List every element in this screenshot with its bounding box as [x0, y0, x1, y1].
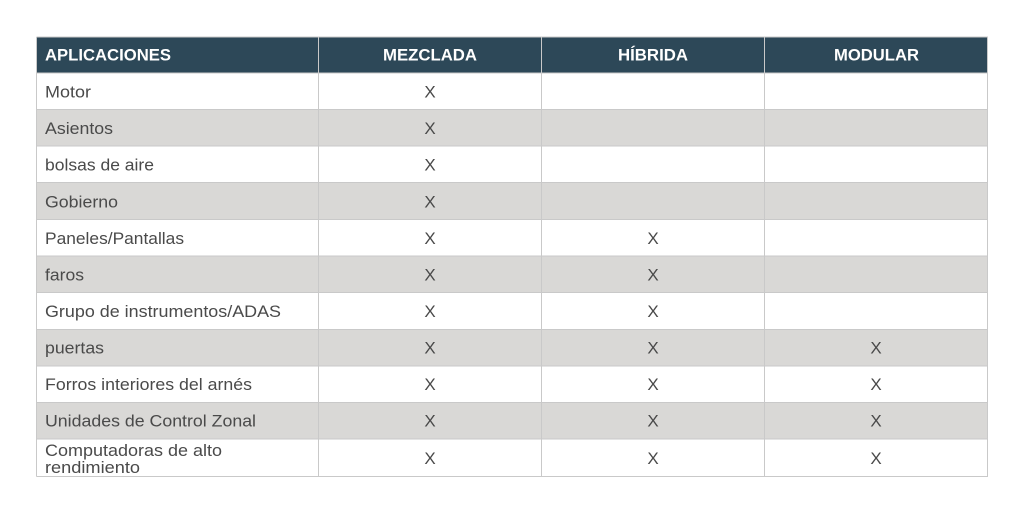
row: Paneles/Pantallas: [45, 229, 659, 248]
row: Unidades de Control Zonal: Unidades de Control Zonal: [45, 412, 256, 430]
row: Computadoras de alto rendimiento: Computadoras de alto: [45, 441, 222, 460]
row: puertas: X: [647, 338, 659, 358]
row: puertas: [45, 338, 882, 358]
row: Forros interiores del arnés: X: [647, 375, 659, 394]
table header row: APLICACIONES: [45, 46, 171, 64]
row: Grupo de instrumentos/ADAS: X: [647, 302, 659, 321]
shaded row backgrounds: [36, 110, 988, 439]
row: Gobierno: X: [424, 192, 436, 212]
row: Motor: X: [424, 82, 436, 102]
row: Asientos: Asientos: [45, 119, 113, 138]
table header row: [36, 37, 988, 73]
row: Forros interiores del arnés: Forros interiores del arnés: [45, 375, 252, 394]
row: Forros interiores del arnés: X: [424, 375, 436, 394]
row: Grupo de instrumentos/ADAS: X: [424, 302, 436, 321]
row: Forros interiores del arnés: [45, 375, 882, 394]
row: Gobierno: Gobierno: [45, 192, 118, 212]
table header row: MODULAR: [834, 46, 919, 64]
row: faros: X: [424, 266, 436, 284]
row: Gobierno: [45, 192, 436, 212]
row: Computadoras de alto rendimiento: rendimiento: [45, 458, 140, 477]
row: bolsas de aire: X: [424, 156, 436, 174]
row: Motor: [45, 82, 436, 102]
row: Paneles/Pantallas: X: [424, 229, 436, 248]
row: Computadoras de alto rendimiento: [45, 441, 882, 477]
row: Asientos: [45, 119, 436, 138]
row: Unidades de Control Zonal: [45, 412, 882, 430]
row: bolsas de aire: bolsas de aire: [45, 156, 154, 174]
row: faros: [45, 266, 659, 284]
row: Motor: Motor: [45, 82, 91, 102]
row: Computadoras de alto rendimiento: X: [647, 449, 659, 468]
row: puertas: X: [870, 338, 882, 358]
row: Unidades de Control Zonal: X: [647, 412, 659, 430]
row: Forros interiores del arnés: X: [870, 375, 882, 394]
row: Computadoras de alto rendimiento: X: [424, 449, 436, 468]
row: Asientos: X: [424, 119, 436, 138]
row: faros: faros: [45, 266, 84, 284]
row: puertas: puertas: [45, 338, 104, 358]
table header row: HÍBRIDA: [618, 46, 688, 64]
table header row: MEZCLADA: [383, 46, 477, 64]
row: Unidades de Control Zonal: X: [424, 412, 436, 430]
row: Unidades de Control Zonal: X: [870, 412, 882, 430]
row: Grupo de instrumentos/ADAS: Grupo de instrumentos/ADAS: [45, 302, 281, 321]
row: Paneles/Pantallas: X: [647, 229, 659, 248]
row: faros: X: [647, 266, 659, 284]
row: Paneles/Pantallas: Paneles/Pantallas: [45, 229, 184, 248]
row: puertas: X: [424, 338, 436, 358]
row: Computadoras de alto rendimiento: X: [870, 449, 882, 468]
row: Grupo de instrumentos/ADAS: [45, 302, 659, 321]
row: bolsas de aire: [45, 156, 436, 174]
